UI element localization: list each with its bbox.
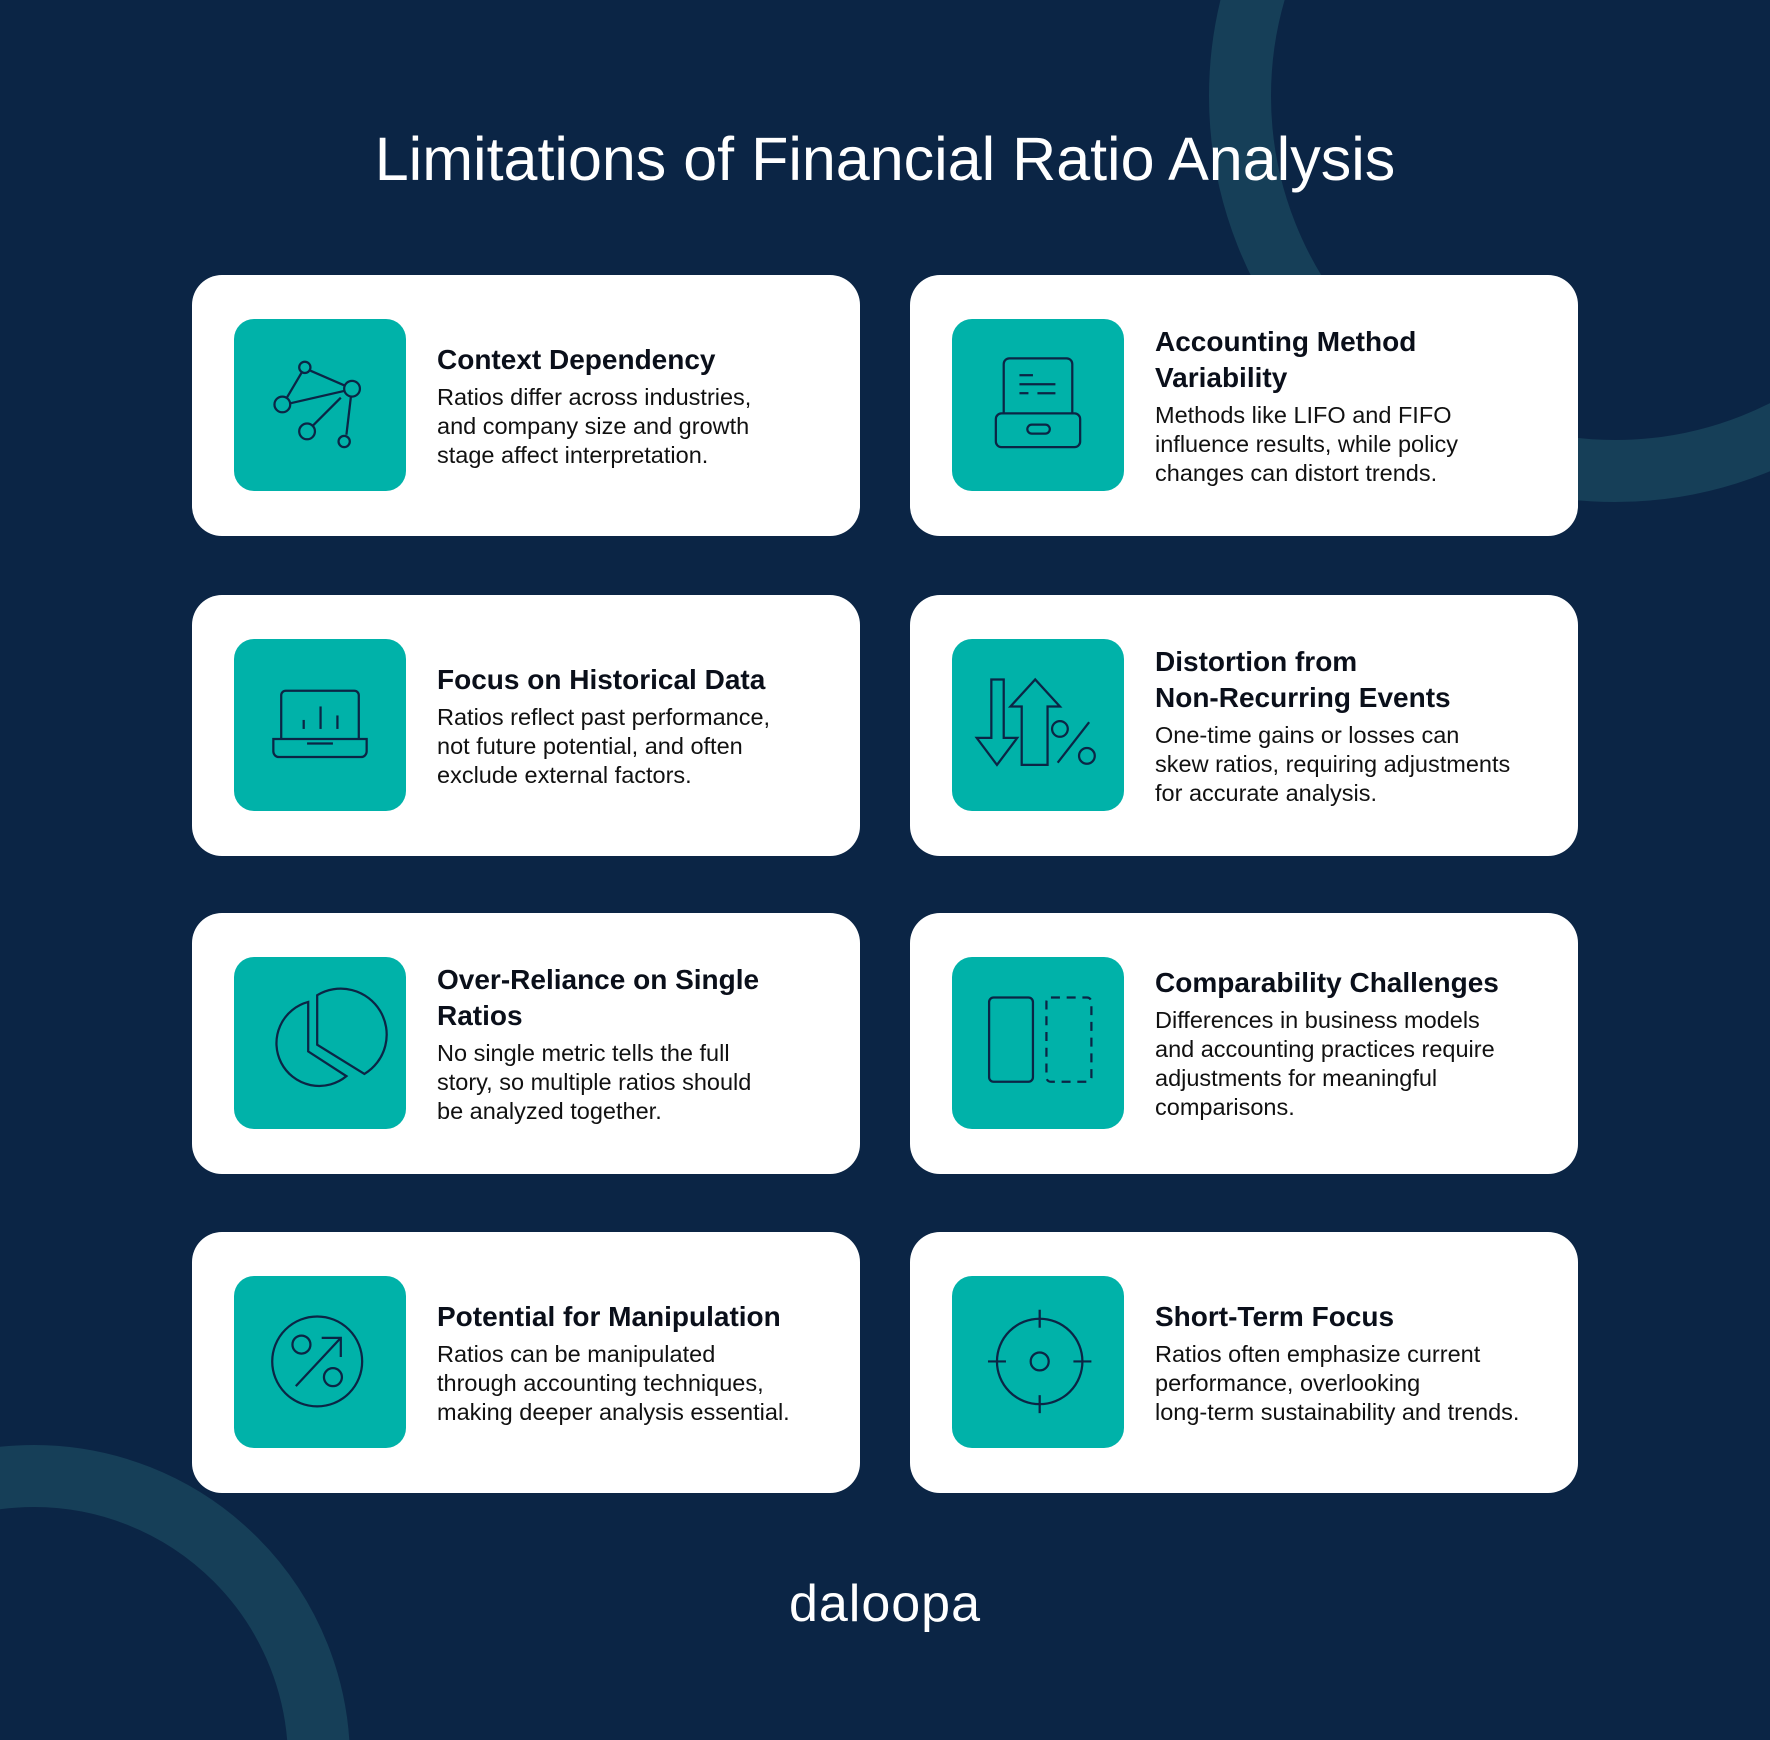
text: Methods like LIFO and FIFO — [1155, 402, 1451, 428]
text: stage affect interpretation. — [437, 442, 708, 468]
text: be analyzed together. — [437, 1098, 662, 1124]
panel: historical data — [192, 595, 860, 856]
text: adjustments for meaningful — [1155, 1065, 1437, 1091]
icon: percent circle — [234, 1276, 406, 1448]
panel: single ratios — [192, 913, 860, 1174]
icon: crosshair — [952, 1276, 1124, 1448]
text: not future potential, and often — [437, 732, 743, 758]
text: Potential for Manipulation — [437, 1300, 781, 1332]
icon: drawer — [952, 319, 1124, 491]
text: Comparability Challenges — [1155, 967, 1499, 998]
text: Context Dependency — [437, 344, 716, 374]
text: making deeper analysis essential. — [437, 1398, 790, 1424]
logo: daloopa — [789, 1575, 981, 1633]
text: changes can distort trends. — [1155, 460, 1437, 486]
text — [1155, 646, 1510, 806]
icon: network — [234, 319, 406, 491]
text — [1155, 967, 1499, 1120]
text: through accounting techniques, — [437, 1370, 764, 1396]
text: performance, overlooking — [1155, 1370, 1420, 1396]
text — [1155, 326, 1458, 486]
text: Over-Reliance on Single — [437, 964, 759, 994]
panel: short-term — [910, 1232, 1578, 1493]
text: story, so multiple ratios should — [437, 1068, 751, 1094]
text: One-time gains or losses can — [1155, 722, 1459, 748]
text: comparisons. — [1155, 1094, 1295, 1120]
text — [1155, 1300, 1519, 1425]
text: Accounting Method — [1155, 326, 1416, 356]
icon: laptop — [234, 639, 406, 811]
icon: two rects — [952, 957, 1124, 1129]
text: for accurate analysis. — [1155, 780, 1377, 806]
text: Focus on Historical Data — [437, 664, 765, 694]
text: exclude external factors. — [437, 762, 692, 788]
text: Distortion from — [1155, 646, 1357, 676]
text: Variability — [1155, 362, 1287, 392]
panel: non-recurring — [910, 595, 1578, 856]
text — [437, 964, 759, 1124]
icon: arrows percent — [952, 639, 1124, 811]
text: and accounting practices require — [1155, 1036, 1495, 1062]
text: skew ratios, requiring adjustments — [1155, 750, 1510, 776]
text — [437, 664, 770, 788]
panel: context dependency — [192, 275, 860, 536]
text: influence results, while policy — [1155, 430, 1458, 456]
text: No single metric tells the full — [437, 1040, 730, 1066]
text: long-term sustainability and trends. — [1155, 1398, 1519, 1424]
text: Ratios often emphasize current — [1155, 1340, 1480, 1366]
icon: pie — [234, 957, 406, 1129]
panel: comparability — [910, 913, 1578, 1174]
panel: accounting method — [910, 275, 1578, 536]
text: Differences in business models — [1155, 1007, 1480, 1033]
text: Short-Term Focus — [1155, 1300, 1394, 1332]
panel: manipulation — [192, 1232, 860, 1493]
text: Ratios differ across industries, — [437, 384, 751, 410]
title: Limitations of Financial Ratio Analysis — [375, 125, 1395, 193]
text: Ratios — [437, 1000, 523, 1030]
text: Non-Recurring Events — [1155, 682, 1451, 712]
text: Ratios reflect past performance, — [437, 704, 770, 730]
text — [437, 1300, 790, 1425]
text — [437, 344, 751, 468]
text: Ratios can be manipulated — [437, 1340, 715, 1366]
text: and company size and growth — [437, 412, 749, 438]
